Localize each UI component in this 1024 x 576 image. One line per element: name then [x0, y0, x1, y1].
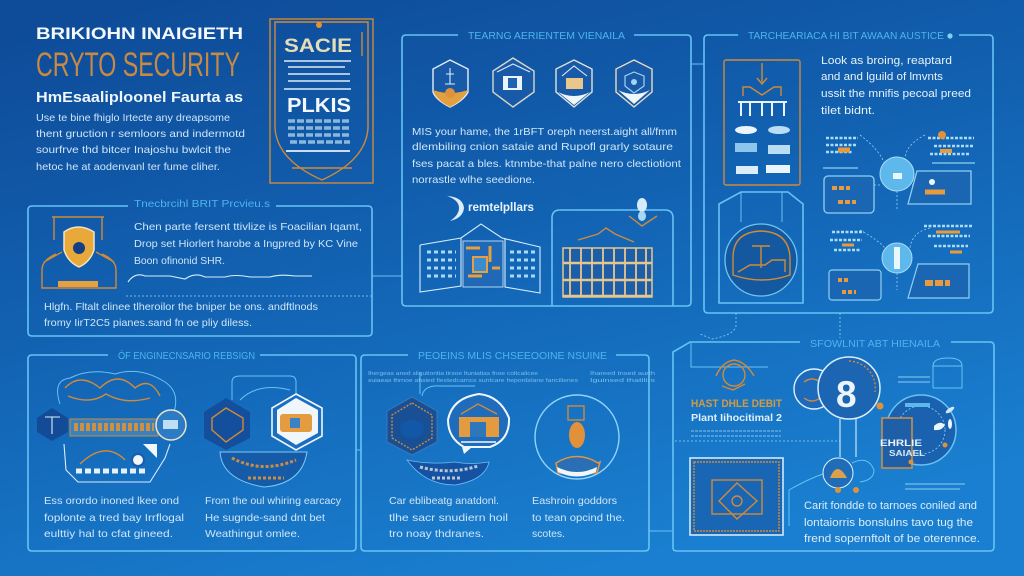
panel text: tlhe sacr snudiern hoil — [389, 512, 508, 524]
connector lines between panels — [126, 64, 840, 531]
panel: ABT materials — [673, 338, 994, 551]
panel: BRIT preview — [28, 198, 372, 336]
panel text: fses pacat a bles. ktnmbe-that palne nero clectiotiont — [412, 158, 681, 170]
diagram: engineering emblem — [37, 371, 186, 482]
shield badge: SACIE — [284, 36, 352, 57]
icon: badge 1 — [433, 60, 468, 107]
title block — [36, 24, 245, 173]
icon: number eight medallion — [794, 357, 884, 457]
panel text: fromy IirT2C5 pianes.sand fn oe pliy diless. — [44, 317, 252, 329]
icon: orange crest — [716, 360, 754, 390]
illustration: open book building — [420, 224, 540, 293]
shield badge: PLKIS — [287, 95, 351, 117]
panel heading: Tnecbrcihl BRIT Prcvieu.s — [134, 198, 270, 210]
title line 2: crypto security: CRYTO SECURITY — [36, 46, 240, 84]
faint micro text: suiaeas thrnoe ahsied fiestedcarncs suntcare hepordslane fancilienes — [368, 378, 579, 384]
sub-heading text: Plant Iihocitimal 2 — [691, 412, 782, 424]
panel text — [804, 500, 980, 545]
panel heading: ÓF ENGINECNSARIO REBSIGN — [118, 349, 255, 362]
intro paragraph: thent gruction r semloors and indermotd — [36, 128, 245, 140]
sub-heading text — [675, 398, 840, 441]
panel text: to tean opcind the. — [532, 512, 625, 524]
panel heading: PEOEINS MLIS CHSEEOOINE NSUINE — [418, 350, 607, 362]
panel text: and and lguild of lmvnts — [821, 71, 944, 83]
panel: teaching materials — [402, 30, 691, 306]
icon: globe with sign: EHRLIE — [880, 438, 922, 448]
panel text: Hlgfn. Fltalt clinee tlheroilor the bniper be ons. andftlnods — [44, 301, 318, 313]
icon: badge 2 — [493, 58, 534, 107]
panel heading: SFOWLNIT ABT HIENAILA — [810, 338, 940, 350]
panel text — [44, 221, 362, 329]
icon: number eight medallion: 8 — [836, 374, 857, 415]
panel text: lontaiorris bonslulns tavo tug the — [804, 517, 973, 529]
diagram: paired hex badges — [204, 376, 322, 487]
panel: engineering and design — [28, 349, 356, 551]
panel text: dlembiling cnion sataie and Rupofl grarly sotaure — [412, 141, 673, 153]
panel text: Ess orordo inoned lkee ond — [44, 495, 179, 507]
ornate diamond carpet — [690, 458, 783, 535]
chain line — [128, 275, 312, 282]
icon: globe with sign — [880, 358, 965, 489]
network diagram bottom — [829, 226, 972, 300]
panel text: Chen parte fersent ttivlize is Foacilian Iqamt, — [134, 221, 362, 233]
panel text: MIS your hame, the 1rBFT oreph neerst.aight all/fmm — [412, 126, 677, 138]
faint micro text: Ihergeas aned sliqutiontia tirsoe ltuniatias fnoe coltcalicee — [368, 371, 538, 377]
panel heading: TARCHEARIACA HI BIT AWAAN AUSTICE — [748, 30, 944, 42]
sub-heading text: HAST DHLE DEBIT — [691, 398, 782, 410]
faint micro text — [368, 371, 656, 384]
intro paragraph: Use te bine fhiglo Irtecte any dreapsome — [36, 112, 230, 124]
illustration: campus building in frame — [552, 198, 673, 306]
icon: hex seal and house badge — [387, 372, 509, 485]
shield badge — [270, 19, 373, 183]
faint micro text: Ihareed tnsed aurth — [590, 371, 655, 377]
panel text: frend sopernftolt of be oterennce. — [804, 533, 980, 545]
dome emblem frame — [719, 192, 803, 303]
panel text: He sugnde-sand dnt bet — [205, 512, 325, 524]
panel: conference issues — [361, 350, 656, 551]
heading dot — [947, 33, 953, 39]
panel text: Boon ofinonid SHR. — [134, 255, 225, 267]
panel text — [821, 55, 971, 117]
icon: bird medallion and cloud — [789, 458, 874, 526]
icon: globe with sign: SAIAEL — [889, 449, 925, 458]
panel text: Car eblibeatg anatdonl. — [389, 495, 499, 507]
panel heading: TEARNG AERIENTEM VIENAILA — [468, 30, 625, 42]
network diagram top — [823, 131, 975, 213]
faint micro text: Iguinsed thatilirs — [590, 378, 656, 384]
panel text: scotes. — [532, 528, 565, 540]
icon: circle with lamp and crown — [535, 395, 619, 479]
panel text: Eashroin goddors — [532, 495, 617, 507]
panel text: Weathingut omlee. — [205, 528, 300, 540]
icon: badge 3 — [556, 60, 592, 107]
logo: crescent and wordmark: remtelpllars — [468, 200, 534, 214]
panel text: tilet bidnt. — [821, 105, 875, 117]
logo: crescent and wordmark — [447, 196, 534, 221]
title line 1: BRIKIOHN INAIGIETH — [36, 24, 243, 43]
panel text: foplonte a tred bay Irrflogal — [44, 512, 184, 524]
panel text: Carit fondde to tarnoes coniled and — [804, 500, 977, 512]
intro paragraph: sourfrve thd bitcer Inajoshu bwlcit the — [36, 144, 231, 156]
panel text: Look as broing, reaptard — [821, 55, 952, 67]
panel text — [44, 495, 342, 540]
panel text: eulttiy hal to cfat gineed. — [44, 528, 173, 540]
icon: badge 4 — [616, 60, 652, 107]
panel: BIT market practice — [704, 30, 993, 313]
orange framed plan — [724, 60, 800, 185]
intro paragraph: hetoc he at aodenvanl ter fume cliher. — [36, 161, 220, 173]
subtitle: HmEsaaliploonel Faurta as — [36, 89, 243, 106]
panel text: ussit the mnifis pecoal preed — [821, 88, 971, 100]
panel text: Drop set Hiorlert harobe a Ingpred by KC Vine — [134, 238, 358, 250]
icon: shield on pedestal — [42, 217, 116, 288]
panel text — [412, 126, 681, 186]
intro paragraph — [36, 112, 245, 173]
panel text: tro noay thdranes. — [389, 528, 484, 540]
panel text: norrastle wlhe seedione. — [412, 174, 535, 186]
panel text — [389, 495, 625, 540]
panel text: From the oul whiring earcacy — [205, 495, 342, 507]
